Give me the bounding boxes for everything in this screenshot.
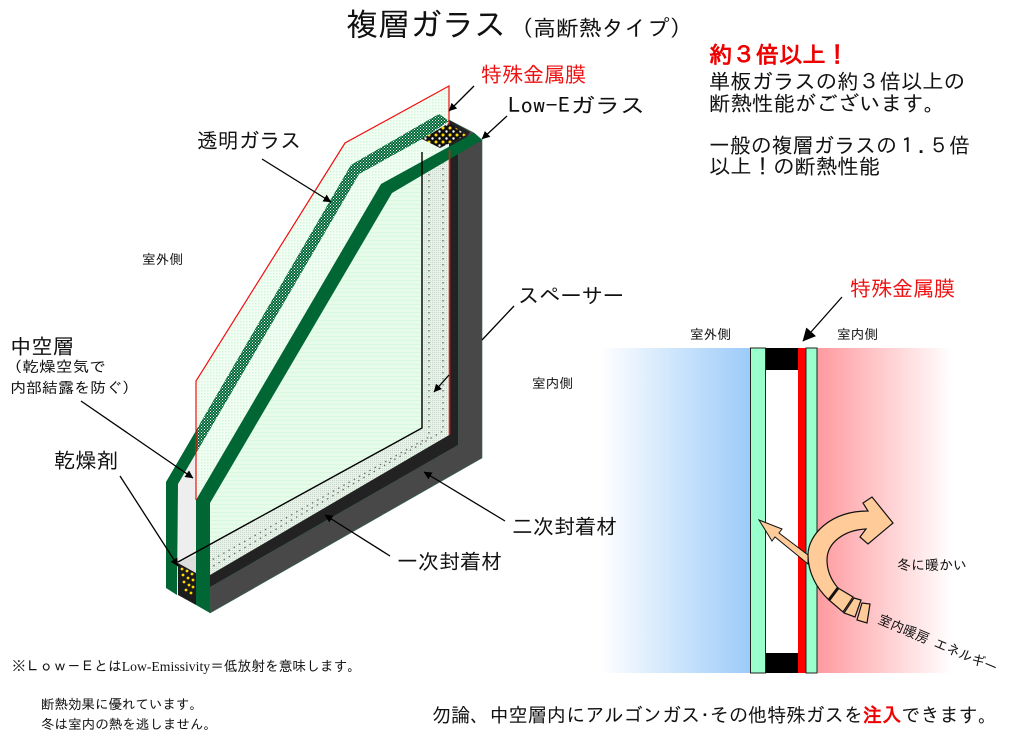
label: 一次封着材: 一次封着材 [397, 551, 502, 572]
air gap [177, 452, 196, 563]
label: 特殊金属膜 right: 特殊金属膜 [850, 278, 955, 299]
label: 室外側 left: 室外側 [142, 252, 183, 266]
label: 室内暖房エネルギー: 室内暖房 エネルギー [876, 612, 1000, 675]
callout: performance: 一般の複層ガラスの１.５倍 [709, 135, 970, 156]
label: 乾燥剤: 乾燥剤 [54, 450, 118, 471]
callout: performance: 以上！の断熱性能 [709, 156, 880, 177]
label: 室外側 right: 室外側 [690, 327, 731, 341]
note: insulation: 断熱効果に優れています。 [41, 697, 203, 711]
title: (高断熱タイプ) [522, 17, 681, 39]
interior glass area [178, 170, 422, 562]
label: 中空層: 中空層 [10, 336, 74, 357]
outer glass pane [750, 348, 766, 673]
label: Low-Eガラス: Low-Eガラス [508, 95, 645, 116]
callout: performance: 単板ガラスの約３倍以上の [709, 71, 965, 92]
label: 乾燥剤 [54, 450, 178, 566]
air gap [766, 348, 798, 673]
label: 中空層: (乾燥空気で [14, 359, 106, 374]
metal film [798, 348, 806, 673]
section diagram: glass cross-section [600, 348, 952, 673]
spacer top [766, 348, 798, 370]
outer glass edge: solid [166, 114, 449, 595]
note: insulation: 冬は室内の熱を逃しません。 [41, 717, 217, 731]
footnote: Low-E: ※Ｌｏｗ－ＥとはLow-Emissivity＝低放射を意味します。 [12, 659, 361, 675]
label: 二次封着材 [424, 472, 617, 537]
arrow: indoor heating energy [808, 497, 893, 623]
label: 中空層 [10, 336, 193, 478]
callout: performance: 断熱性能がございます。 [709, 93, 945, 114]
diagram: double glazing cutaway [166, 86, 482, 613]
label: スペーサー [434, 285, 624, 392]
spacer [178, 124, 449, 575]
inner Low-E glass edge [196, 133, 482, 613]
label: スペーサー: スペーサー [518, 285, 624, 306]
arrow: reflected small arrow [759, 520, 808, 564]
label: 透明ガラス [197, 130, 331, 202]
red metal film line [196, 86, 450, 500]
indoor gradient [817, 348, 952, 673]
inner glass pane [806, 348, 817, 673]
label: 二次封着材: 二次封着材 [512, 516, 617, 537]
label: 冬に暖かい: 冬に暖かい [897, 558, 967, 572]
spacer bottom [766, 653, 798, 673]
title [346, 8, 681, 40]
label: Low-Eガラス [482, 95, 645, 139]
label: 特殊金属膜 [449, 64, 586, 111]
callout: performance: 約３倍以上！ [709, 43, 849, 66]
label: 室内側 right: 室内側 [837, 327, 878, 341]
secondary sealant: dark grey frame [210, 120, 482, 613]
label: 透明ガラス: 透明ガラス [197, 130, 301, 151]
desiccant bottom [178, 563, 196, 605]
primary sealant: black band [210, 120, 470, 587]
callout: performance [709, 43, 970, 177]
label: 特殊金属膜: 特殊金属膜 [481, 64, 586, 85]
desiccant top [422, 123, 466, 148]
label: 室内側 left: 室内側 [532, 376, 573, 390]
title: 複層ガラス [346, 8, 506, 40]
label: 特殊金属膜 right [803, 278, 955, 341]
note: argon gas: 勿論、中空層内にアルゴンガス･その他特殊ガスを注入できます。 [432, 705, 997, 725]
note: insulation [41, 697, 217, 731]
label: 一次封着材 [325, 515, 502, 572]
inner black outline [178, 152, 422, 562]
outer glass sheet with red film [196, 86, 449, 500]
outer glass edge: dotted part [197, 114, 448, 452]
label: 中空層: 内部結露を防ぐ) [10, 380, 130, 395]
outdoor gradient [600, 348, 750, 673]
